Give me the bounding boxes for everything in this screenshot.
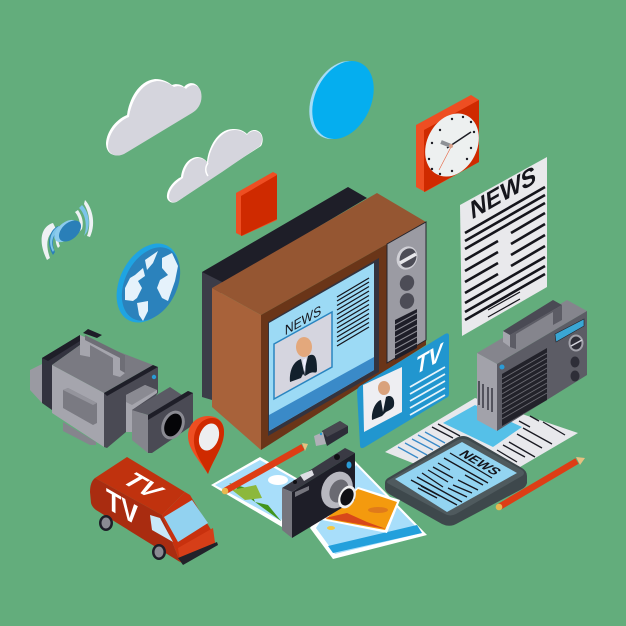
van windshield bbox=[164, 500, 208, 542]
card presenter figure bbox=[372, 381, 394, 420]
card text lines bbox=[410, 367, 445, 415]
retro television bbox=[202, 187, 426, 450]
flat document sheet bbox=[385, 398, 578, 490]
icon: wifi signal bbox=[42, 200, 93, 260]
tv presenter card: TV bbox=[416, 337, 444, 381]
camera lens bbox=[157, 407, 189, 443]
news tablet bbox=[385, 436, 527, 526]
compact camera bbox=[282, 448, 359, 538]
radio speaker grill bbox=[502, 348, 547, 426]
tv screen: NEWS bbox=[285, 302, 321, 338]
icon: small double cloud bbox=[167, 129, 263, 203]
screen text lines bbox=[337, 278, 369, 346]
usb flash drive bbox=[314, 421, 348, 446]
video camera bbox=[30, 329, 193, 453]
sheet text lines bbox=[398, 432, 445, 458]
icon: red square bbox=[236, 172, 277, 236]
icon: blue disc bbox=[297, 51, 386, 149]
camera handle bbox=[80, 335, 125, 377]
newspaper: NEWS bbox=[469, 160, 537, 226]
news anchor figure bbox=[290, 337, 317, 382]
van wheels bbox=[99, 515, 166, 560]
tv news van bbox=[90, 457, 218, 565]
orange photo print bbox=[322, 487, 400, 533]
map pin bbox=[188, 416, 224, 474]
tv news van: TV bbox=[115, 469, 171, 502]
tv news van: TV bbox=[106, 483, 139, 534]
icon: large cloud bbox=[106, 79, 202, 156]
bottom photo print bbox=[310, 461, 427, 559]
landscape photo print bbox=[211, 457, 300, 527]
clock hour ticks bbox=[428, 116, 475, 175]
van bumper bbox=[178, 542, 218, 565]
camera rear plate bbox=[30, 364, 42, 403]
news tablet: NEWS bbox=[455, 448, 505, 477]
tablet text lines bbox=[411, 453, 492, 505]
newspaper bbox=[460, 157, 547, 336]
icon: red wall clock bbox=[415, 95, 489, 192]
tv cabinet bbox=[212, 193, 426, 450]
tv presenter card bbox=[357, 333, 449, 448]
tv screen bbox=[268, 258, 379, 436]
radio handle bbox=[503, 300, 562, 349]
globe continents bbox=[125, 251, 178, 321]
van side window bbox=[150, 515, 173, 542]
tv rear housing bbox=[202, 187, 367, 400]
newspaper text lines bbox=[465, 187, 545, 320]
tv control panel bbox=[387, 222, 426, 363]
radio bbox=[477, 300, 587, 431]
icon: globe bbox=[104, 233, 192, 333]
icon: red pencil left bbox=[222, 443, 308, 494]
camera lens bbox=[315, 466, 359, 514]
news photo on screen bbox=[274, 312, 332, 399]
icon: red pencil right bbox=[496, 457, 585, 510]
